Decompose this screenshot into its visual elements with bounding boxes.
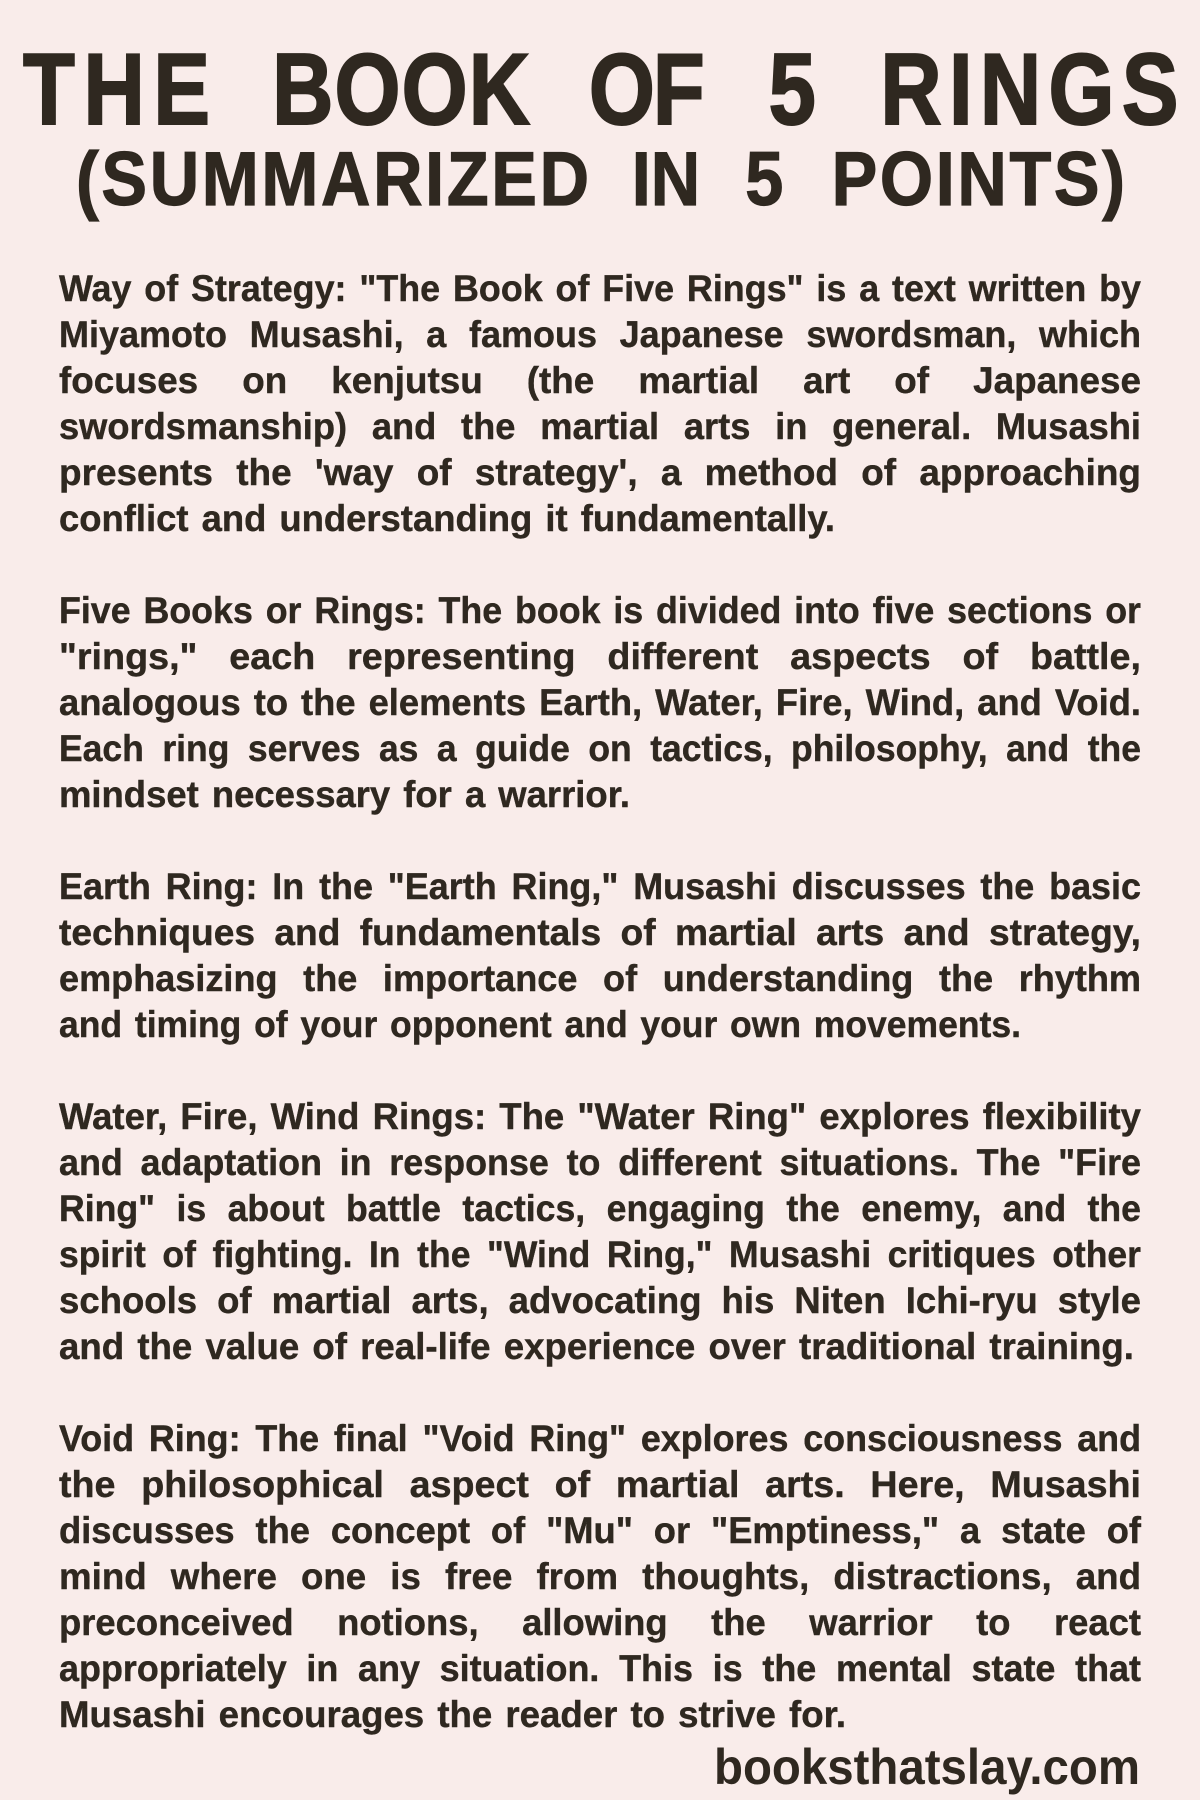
text block: water, fire, wind rings: spirit of fighting. In the "Wind Ring," Musashi critiques other bbox=[59, 1234, 1141, 1275]
title: 5 bbox=[769, 33, 816, 146]
title bbox=[23, 33, 1179, 146]
text block: way of strategy: swordsmanship) and the martial arts in general. Musashi bbox=[59, 406, 1141, 447]
text block: five books or rings: Five Books or Rings: The book is divided into five sections or bbox=[59, 590, 1141, 631]
text block: earth ring: emphasizing the importance of understanding the rhythm bbox=[59, 958, 1141, 999]
text block: water, fire, wind rings: Water, Fire, Wind Rings: The "Water Ring" explores flexibility bbox=[59, 1096, 1141, 1137]
title: THE bbox=[23, 33, 210, 146]
text block: water, fire, wind rings: Ring" is about battle tactics, engaging the enemy, and the bbox=[59, 1188, 1141, 1229]
text block: earth ring: and timing of your opponent and your own movements. bbox=[59, 1004, 1021, 1045]
subtitle: POINTS) bbox=[832, 138, 1125, 222]
text block: void ring: appropriately in any situation. This is the mental state that bbox=[59, 1648, 1141, 1689]
text block: water, fire, wind rings: schools of martial arts, advocating his Niten Ichi-ryu style bbox=[59, 1280, 1141, 1321]
text block: water, fire, wind rings: and adaptation in response to different situations. The "Fire bbox=[59, 1142, 1141, 1183]
text block: void ring: mind where one is free from thoughts, distractions, and bbox=[59, 1556, 1141, 1597]
text block: way of strategy bbox=[59, 268, 1141, 539]
title: OF bbox=[589, 33, 705, 146]
subtitle: 5 bbox=[745, 138, 783, 222]
text block: earth ring bbox=[59, 866, 1141, 1045]
text block: five books or rings: "rings," each representing different aspects of battle, bbox=[59, 636, 1141, 677]
text block: void ring: preconceived notions, allowing the warrior to react bbox=[59, 1602, 1141, 1643]
text block: five books or rings bbox=[59, 590, 1141, 815]
subtitle: IN bbox=[632, 138, 700, 222]
subtitle: (SUMMARIZED bbox=[76, 138, 589, 222]
text block: five books or rings: analogous to the elements Earth, Water, Fire, Wind, and Void. bbox=[59, 682, 1141, 723]
text block: earth ring: techniques and fundamentals of martial arts and strategy, bbox=[59, 912, 1141, 953]
text block: way of strategy: presents the 'way of strategy', a method of approaching bbox=[59, 452, 1141, 493]
text block: five books or rings: mindset necessary for a warrior. bbox=[59, 774, 630, 815]
subtitle bbox=[76, 138, 1125, 222]
text block: void ring: the philosophical aspect of martial arts. Here, Musashi bbox=[59, 1464, 1141, 1505]
text block: way of strategy: Way of Strategy: "The Book of Five Rings" is a text written by bbox=[59, 268, 1141, 309]
title: BOOK bbox=[272, 33, 530, 146]
text block: void ring: Void Ring: The final "Void Ring" explores consciousness and bbox=[59, 1418, 1141, 1459]
text block: void ring: Musashi encourages the reader to strive for. bbox=[59, 1694, 846, 1735]
title: RINGS bbox=[880, 33, 1179, 146]
text block: void ring bbox=[59, 1418, 1142, 1735]
text block: water, fire, wind rings bbox=[59, 1096, 1141, 1367]
text block: water, fire, wind rings: and the value of real-life experience over traditional training. bbox=[59, 1326, 1134, 1367]
text block: way of strategy: Miyamoto Musashi, a famous Japanese swordsman, which bbox=[59, 314, 1141, 355]
text block: earth ring: Earth Ring: In the "Earth Ring," Musashi discusses the basic bbox=[59, 866, 1141, 907]
text block: way of strategy: focuses on kenjutsu (the martial art of Japanese bbox=[59, 360, 1141, 401]
text block: five books or rings: Each ring serves as a guide on tactics, philosophy, and the bbox=[59, 728, 1141, 769]
footer website: booksthatslay.com bbox=[714, 1739, 1140, 1795]
text block: void ring: discusses the concept of "Mu" or "Emptiness," a state of bbox=[59, 1510, 1142, 1551]
text block: way of strategy: conflict and understanding it fundamentally. bbox=[59, 498, 835, 539]
